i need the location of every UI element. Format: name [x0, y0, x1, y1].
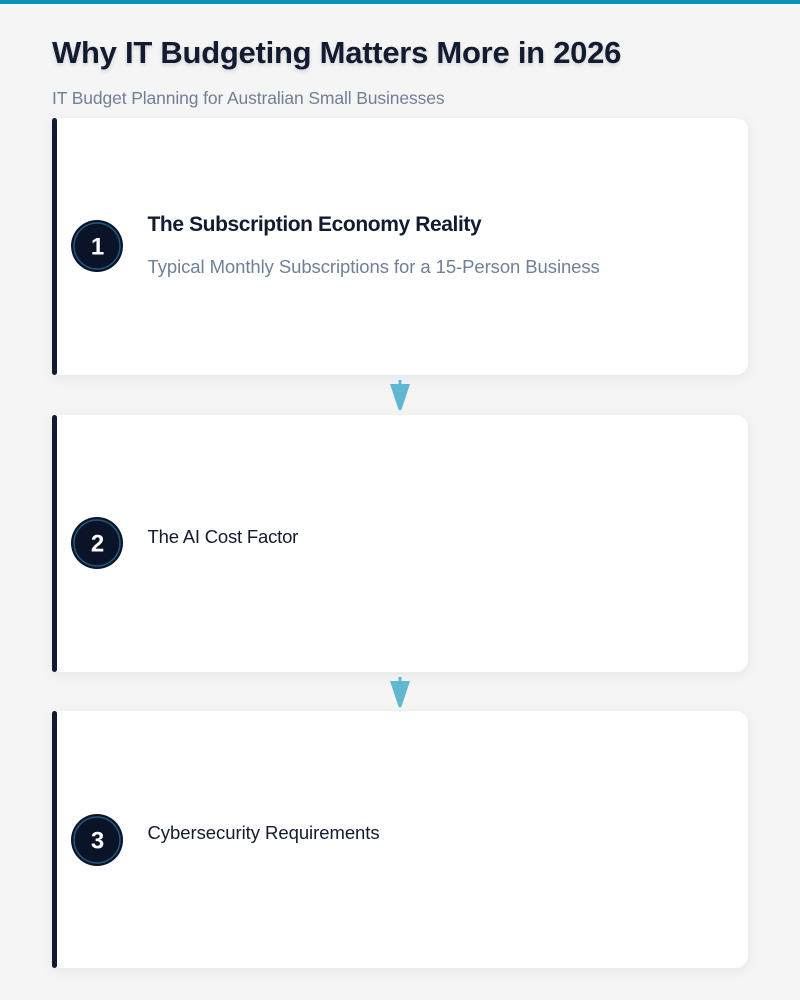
- panel: step 1 subscription economy: [52, 118, 748, 375]
- panel: step 3 cybersecurity: [52, 711, 748, 968]
- arrow: step 2 to step 3: [390, 677, 410, 708]
- icon: number badge 1: 1: [91, 234, 104, 260]
- panel: step 2 AI cost factor: [52, 414, 748, 672]
- left accent bar: step 1: [52, 118, 57, 375]
- heading: step 2: The AI Cost Factor: [148, 526, 298, 546]
- left accent bar: step 2: [52, 414, 57, 672]
- icon: number badge 1: [71, 220, 123, 272]
- icon: number badge 2: 2: [91, 530, 104, 557]
- text: step 1 description: Typical Monthly Subscriptions for a 15-Person Business: [148, 256, 600, 277]
- heading: step 1: The Subscription Economy Reality: [148, 213, 481, 236]
- icon: number badge 3: [71, 814, 123, 866]
- icon: number badge 2: [71, 517, 123, 569]
- top accent bar: [0, 0, 800, 4]
- heading: step 3: Cybersecurity Requirements: [148, 822, 380, 843]
- title: Why IT Budgeting Matters More in 2026: [52, 35, 621, 70]
- left accent bar: step 3: [52, 711, 57, 968]
- icon: number badge 3: 3: [91, 828, 104, 854]
- arrow: step 1 to step 2: [390, 380, 410, 410]
- subtitle: IT Budget Planning for Australian Small Businesses: [52, 88, 445, 108]
